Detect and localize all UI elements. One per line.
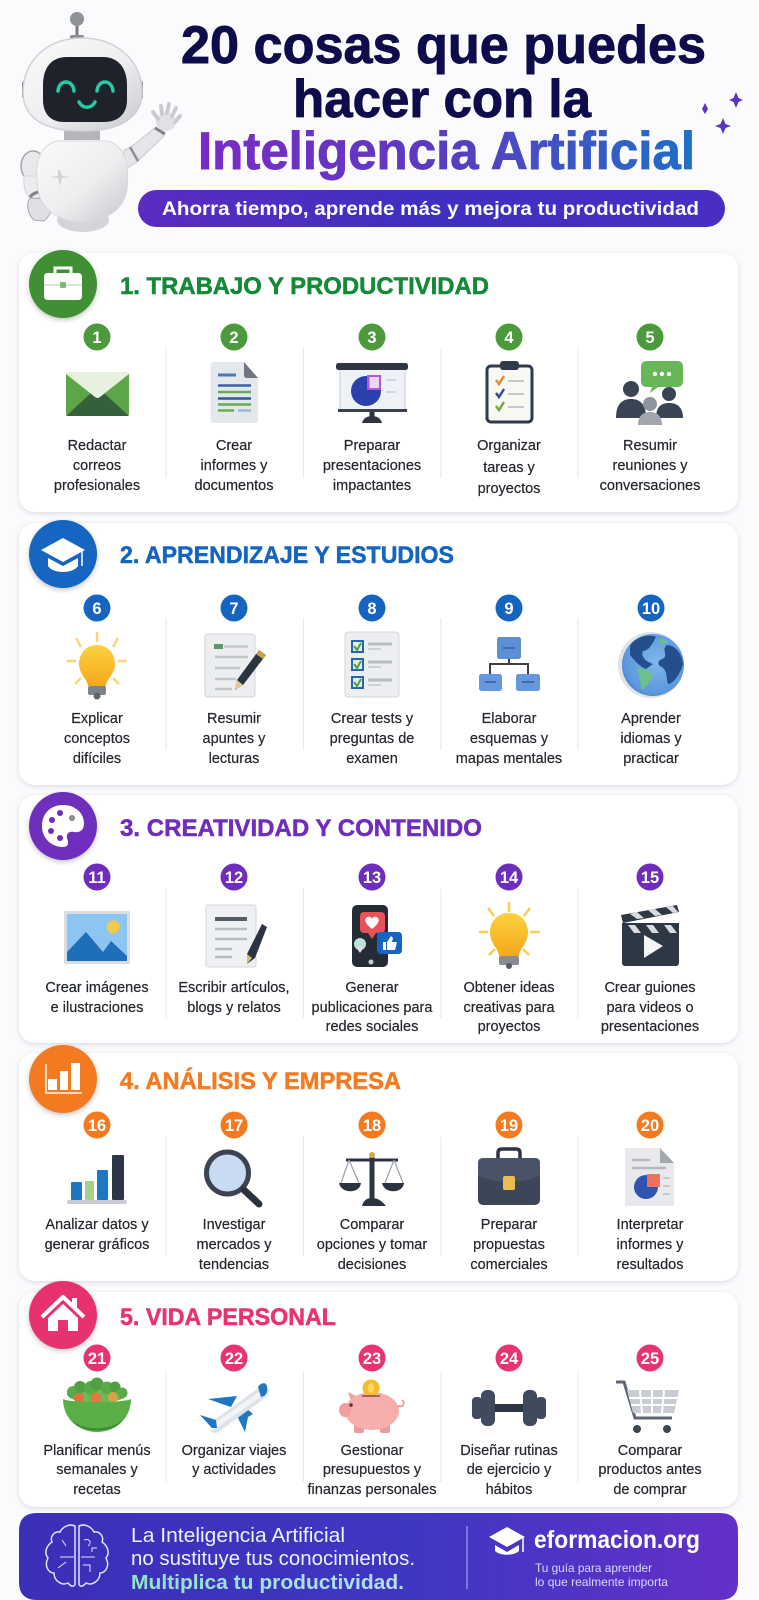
item 15: crear guiones: Crear guiones <box>604 980 696 996</box>
item 21: planificar menús: semanales y <box>56 1462 138 1478</box>
item 23: gestionar presupuestos: 23 <box>363 1350 381 1368</box>
title <box>181 16 706 181</box>
item 25: comparar productos: productos antes <box>598 1462 702 1478</box>
title: hacer con la <box>293 70 591 129</box>
item 11: crear imágenes <box>45 864 149 1016</box>
heading: 1. TRABAJO Y PRODUCTIVIDAD <box>120 273 489 300</box>
item 4: organizar tareas <box>477 324 541 497</box>
item 15: crear guiones: para videos o <box>606 1000 694 1016</box>
footer message: Multiplica tu productividad. <box>131 1572 404 1594</box>
item 17: investigar mercados: 17 <box>225 1117 243 1135</box>
item 4: organizar tareas: tareas y <box>483 460 536 476</box>
item 24: diseñar rutinas: de ejercicio y <box>467 1462 552 1478</box>
item 20: interpretar informes: informes y <box>617 1237 684 1253</box>
item 3: preparar presentaciones: impactantes <box>333 478 411 494</box>
subtitle pill <box>138 190 725 227</box>
item 24: diseñar rutinas <box>460 1344 558 1498</box>
item 24: diseñar rutinas: Diseñar rutinas <box>460 1443 558 1459</box>
item 18: comparar opciones: decisiones <box>338 1257 406 1273</box>
item 15: crear guiones: presentaciones <box>601 1019 699 1035</box>
item 14: obtener ideas: Obtener ideas <box>463 980 555 996</box>
item 10: aprender idiomas <box>618 594 684 767</box>
item 23: gestionar presupuestos: presupuestos y <box>323 1462 422 1478</box>
item 21: planificar menús: 21 <box>88 1350 106 1368</box>
item 19: preparar propuestas: Preparar <box>481 1217 537 1233</box>
item 23: gestionar presupuestos: Gestionar <box>341 1443 404 1459</box>
panel: 2 aprendizaje y estudios <box>19 520 738 785</box>
item 4: organizar tareas: 4 <box>504 329 514 347</box>
item 2: crear informes: 2 <box>229 329 239 347</box>
item 21: planificar menús: recetas <box>73 1482 121 1498</box>
item 7: resumir apuntes: 7 <box>229 600 239 618</box>
brand name: eformacion.org <box>534 1526 700 1554</box>
item 25: comparar productos: de comprar <box>613 1482 687 1498</box>
item 1: redactar correos <box>54 324 140 494</box>
item 19: preparar propuestas: 19 <box>500 1117 518 1135</box>
item 8: crear tests: 8 <box>367 600 377 618</box>
panel: 5 vida personal <box>19 1281 738 1507</box>
brand tagline: Tu guía para aprender <box>535 1561 652 1575</box>
icon: eformacion graduation cap <box>489 1527 525 1555</box>
item 7: resumir apuntes: Resumir <box>207 711 261 727</box>
item 18: comparar opciones: Comparar <box>340 1217 404 1233</box>
item 13: generar publicaciones: Generar <box>345 980 399 996</box>
item 5: resumir reuniones: conversaciones <box>600 478 700 494</box>
brand tagline <box>535 1561 668 1589</box>
item 12: escribir artículos: blogs y relatos <box>187 1000 281 1016</box>
item 4: organizar tareas: Organizar <box>477 438 541 454</box>
item 3: preparar presentaciones <box>323 324 421 494</box>
item 1: redactar correos: 1 <box>92 329 102 347</box>
item 15: crear guiones: 15 <box>641 869 659 887</box>
item 10: aprender idiomas: Aprender <box>621 711 681 727</box>
item 14: obtener ideas <box>463 864 555 1035</box>
item 4: organizar tareas: proyectos <box>478 481 540 497</box>
item 9: elaborar esquemas: 9 <box>504 600 514 618</box>
item 22: organizar viajes: y actividades <box>192 1462 276 1478</box>
item 3: preparar presentaciones: Preparar <box>344 438 400 454</box>
item 18: comparar opciones: 18 <box>363 1117 381 1135</box>
item 20: interpretar informes: resultados <box>617 1257 683 1273</box>
title: Inteligencia Artificial <box>198 122 695 181</box>
item 16: analizar datos: generar gráficos <box>45 1237 149 1253</box>
item 9: elaborar esquemas <box>456 594 562 767</box>
item 13: generar publicaciones: 13 <box>363 869 381 887</box>
subtitle pill: Ahorra tiempo, aprende más y mejora tu productividad <box>162 199 699 220</box>
item 9: elaborar esquemas: Elaborar <box>482 711 537 727</box>
heading: 5. VIDA PERSONAL <box>120 1304 336 1331</box>
item 24: diseñar rutinas: 24 <box>500 1350 519 1368</box>
item 24: diseñar rutinas: hábitos <box>486 1482 532 1498</box>
item 14: obtener ideas: 14 <box>500 869 519 887</box>
panel: 4 análisis y empresa <box>19 1045 738 1281</box>
item 11: crear imágenes: Crear imágenes <box>45 980 149 996</box>
item 21: planificar menús <box>43 1344 151 1498</box>
item 17: investigar mercados: tendencias <box>199 1257 269 1273</box>
icon: sparkles <box>702 92 743 134</box>
item 18: comparar opciones <box>317 1112 427 1273</box>
item 8: crear tests: preguntas de <box>330 731 414 747</box>
robot mascot illustration <box>21 12 180 232</box>
item 1: redactar correos: correos <box>73 458 121 474</box>
item 1: redactar correos: profesionales <box>54 478 140 494</box>
item 6: explicar conceptos: difíciles <box>73 751 121 767</box>
item 23: gestionar presupuestos <box>308 1344 436 1498</box>
item 17: investigar mercados <box>197 1112 272 1273</box>
panel: 1 trabajo y productividad <box>19 250 738 512</box>
item 12: escribir artículos: Escribir artículos, <box>178 980 290 996</box>
item 3: preparar presentaciones: 3 <box>367 329 377 347</box>
item 2: crear informes: informes y <box>201 458 268 474</box>
item 22: organizar viajes <box>182 1344 286 1478</box>
item 10: aprender idiomas: idiomas y <box>620 731 682 747</box>
footer banner <box>19 1513 738 1600</box>
section icon: palette <box>29 792 97 860</box>
footer message: La Inteligencia Artificial <box>131 1525 345 1547</box>
item 15: crear guiones <box>601 864 699 1035</box>
item 11: crear imágenes: e ilustraciones <box>51 1000 143 1016</box>
item 8: crear tests: Crear tests y <box>331 711 414 727</box>
item 19: preparar propuestas: comerciales <box>470 1257 548 1273</box>
item 20: interpretar informes <box>617 1112 684 1273</box>
panel: 3 creatividad y contenido <box>19 792 738 1043</box>
item 6: explicar conceptos: 6 <box>92 600 102 618</box>
item 5: resumir reuniones: 5 <box>645 329 655 347</box>
item 22: organizar viajes: Organizar viajes <box>182 1443 286 1459</box>
item 5: resumir reuniones: reuniones y <box>613 458 688 474</box>
item 10: aprender idiomas: practicar <box>623 751 679 767</box>
section icon: bar chart <box>29 1045 97 1113</box>
item 2: crear informes: documentos <box>194 478 274 494</box>
item 12: escribir artículos: 12 <box>225 869 243 887</box>
heading: 2. APRENDIZAJE Y ESTUDIOS <box>120 542 454 569</box>
item 8: crear tests <box>330 594 414 767</box>
item 9: elaborar esquemas: mapas mentales <box>456 751 562 767</box>
item 19: preparar propuestas: propuestas <box>473 1237 545 1253</box>
heading: 3. CREATIVIDAD Y CONTENIDO <box>120 815 482 842</box>
heading: 4. ANÁLISIS Y EMPRESA <box>120 1067 401 1095</box>
item 7: resumir apuntes: apuntes y <box>203 731 266 747</box>
item 9: elaborar esquemas: esquemas y <box>470 731 549 747</box>
item 25: comparar productos: Comparar <box>618 1443 682 1459</box>
section icon: briefcase <box>29 250 97 318</box>
item 6: explicar conceptos: Explicar <box>71 711 123 727</box>
item 11: crear imágenes: 11 <box>88 869 106 887</box>
header <box>21 12 743 232</box>
item 20: interpretar informes: Interpretar <box>617 1217 684 1233</box>
item 3: preparar presentaciones: presentaciones <box>323 458 421 474</box>
item 17: investigar mercados: mercados y <box>197 1237 272 1253</box>
section icon: house <box>29 1281 97 1349</box>
section icon: graduation cap <box>29 520 97 588</box>
item 25: comparar productos <box>598 1344 702 1498</box>
item 2: crear informes: Crear <box>216 438 252 454</box>
item 7: resumir apuntes <box>203 594 266 767</box>
item 5: resumir reuniones <box>600 324 700 494</box>
item 23: gestionar presupuestos: finanzas personales <box>308 1482 436 1498</box>
item 13: generar publicaciones <box>312 864 433 1035</box>
item 6: explicar conceptos: conceptos <box>64 731 130 747</box>
item 18: comparar opciones: opciones y tomar <box>317 1237 427 1253</box>
item 13: generar publicaciones: publicaciones para <box>312 1000 433 1016</box>
footer message: no sustituye tus conocimientos. <box>131 1548 415 1570</box>
brand tagline: lo que realmente importa <box>535 1575 668 1589</box>
item 6: explicar conceptos <box>64 594 130 767</box>
item 25: comparar productos: 25 <box>641 1350 659 1368</box>
item 21: planificar menús: Planificar menús <box>43 1443 151 1459</box>
item 22: organizar viajes: 22 <box>225 1350 243 1368</box>
item 2: crear informes <box>194 324 274 494</box>
item 19: preparar propuestas <box>470 1112 548 1273</box>
item 16: analizar datos: 16 <box>88 1117 106 1135</box>
item 1: redactar correos: Redactar <box>68 438 127 454</box>
footer message <box>131 1525 415 1594</box>
title: 20 cosas que puedes <box>181 16 706 75</box>
item 8: crear tests: examen <box>346 751 398 767</box>
icon: brain <box>46 1525 108 1586</box>
item 16: analizar datos: Analizar datos y <box>45 1217 149 1233</box>
item 16: analizar datos <box>45 1112 149 1253</box>
item 17: investigar mercados: Investigar <box>203 1217 266 1233</box>
item 14: obtener ideas: proyectos <box>478 1019 540 1035</box>
item 14: obtener ideas: creativas para <box>463 1000 555 1016</box>
item 12: escribir artículos <box>178 864 290 1016</box>
item 20: interpretar informes: 20 <box>641 1117 659 1135</box>
item 13: generar publicaciones: redes sociales <box>326 1019 418 1035</box>
item 10: aprender idiomas: 10 <box>642 600 660 618</box>
item 5: resumir reuniones: Resumir <box>623 438 677 454</box>
item 7: resumir apuntes: lecturas <box>209 751 259 767</box>
